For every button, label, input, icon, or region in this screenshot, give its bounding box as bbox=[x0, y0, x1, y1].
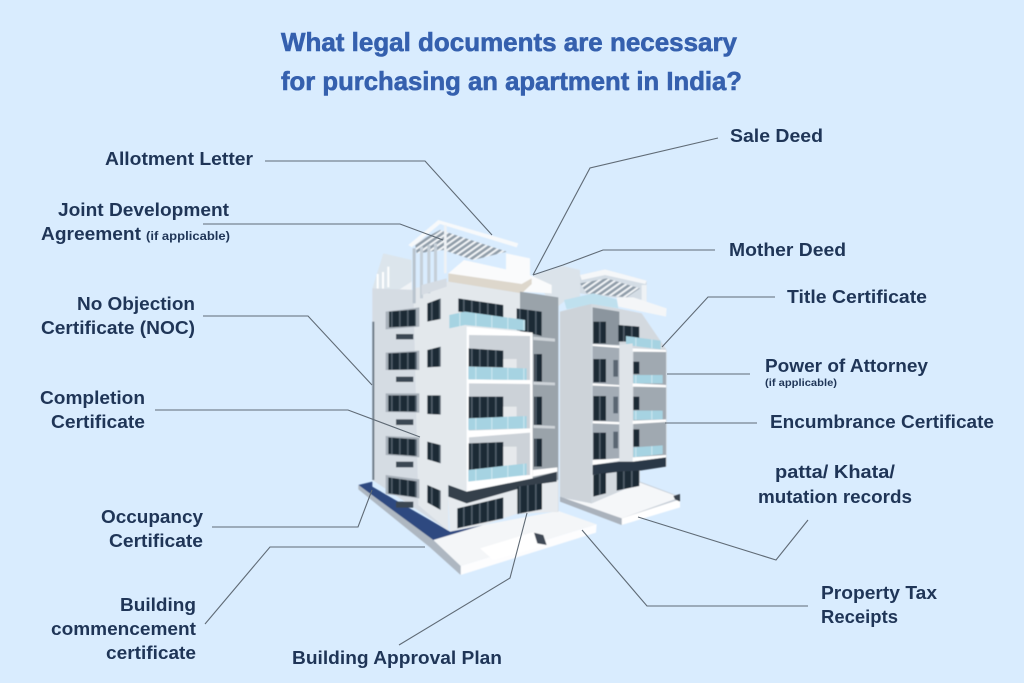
label: patta / Khata / mutation records bbox=[758, 462, 912, 507]
side wing wall bbox=[372, 288, 450, 532]
roof slab bbox=[448, 253, 552, 293]
label: Building Approval Plan: Building Approval Plan bbox=[292, 648, 502, 668]
right column bbox=[520, 292, 558, 512]
label: Property Tax Receipts bbox=[821, 583, 937, 627]
label: Power of Attorney bbox=[765, 356, 928, 389]
label: Occupancy Certificate: Occupancy bbox=[101, 507, 203, 527]
label: No Objection Certificate bbox=[41, 294, 195, 338]
label: Completion Certificate bbox=[40, 388, 145, 432]
label: Completion Certificate: Completion bbox=[40, 388, 145, 408]
label: Joint Development Agreement bbox=[41, 200, 230, 244]
label: Building commencement certificate: certificate bbox=[106, 643, 196, 663]
label: patta / Khata / mutation records: mutation records bbox=[758, 487, 912, 507]
connector lines bbox=[155, 138, 808, 645]
label: patta / Khata / mutation records: patta/ Khata/ bbox=[775, 462, 895, 482]
label: Sale Deed: Sale Deed bbox=[730, 126, 823, 146]
left building bbox=[358, 220, 597, 575]
title: What legal documents are necessary bbox=[281, 27, 738, 57]
label: Joint Development Agreement: (if applicable) bbox=[146, 231, 230, 243]
label: Property Tax Receipts: Receipts bbox=[821, 607, 898, 627]
label: Occupancy Certificate bbox=[101, 507, 203, 551]
title bbox=[281, 27, 742, 96]
ground floor bbox=[448, 480, 558, 532]
main side wall bbox=[413, 282, 522, 531]
label: Occupancy Certificate: Certificate bbox=[109, 531, 203, 551]
label: Joint Development Agreement: Joint Development bbox=[58, 200, 229, 220]
label: Building commencement certificate: commencement bbox=[51, 619, 196, 639]
label: Completion Certificate: Certificate bbox=[51, 412, 145, 432]
label: Property Tax Receipts: Property Tax bbox=[821, 583, 937, 603]
title: for purchasing an apartment in India? bbox=[281, 66, 742, 96]
rooftop tower bbox=[372, 253, 412, 310]
label: Building commencement certificate bbox=[51, 595, 196, 663]
label: Mother Deed: Mother Deed bbox=[729, 240, 846, 260]
label: Encumbrance Certificate: Encumbrance Certificate bbox=[770, 412, 994, 432]
illustration: apartment buildings bbox=[358, 220, 680, 575]
label: No Objection Certificate: Certificate (NOC) bbox=[41, 318, 195, 338]
label: Building commencement certificate: Building bbox=[120, 595, 196, 615]
side windows bbox=[427, 298, 441, 322]
right building bbox=[533, 266, 680, 525]
pergola bbox=[415, 230, 507, 260]
label: Joint Development Agreement: Agreement bbox=[41, 224, 141, 244]
label: Title Certificate: Title Certificate bbox=[787, 287, 927, 307]
label: Power of Attorney: (if applicable) bbox=[765, 378, 837, 389]
balcony frame bbox=[467, 327, 533, 492]
label: Allotment Letter: Allotment Letter bbox=[105, 149, 253, 169]
label: Power of Attorney: Power of Attorney bbox=[765, 356, 928, 376]
label: No Objection Certificate: No Objection bbox=[77, 294, 195, 314]
